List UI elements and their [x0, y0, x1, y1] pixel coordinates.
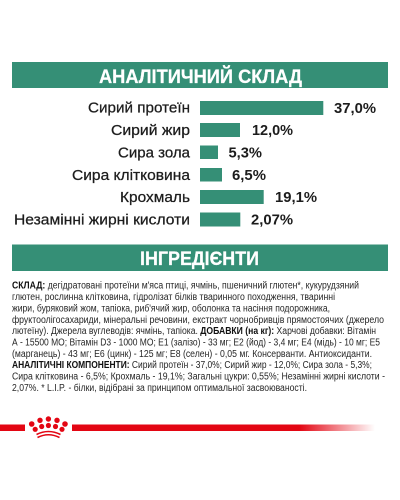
row: crude protein: Сирий протеїн [88, 100, 190, 116]
row: starch [120, 190, 317, 206]
row: crude fibre: Сира клітковина [72, 168, 191, 184]
text block: ingredients: глютен, рослинна клітковина, гідролізат білків тваринного походження, тваринні [12, 291, 335, 303]
row: crude ash: Сира зола [118, 146, 191, 162]
heading: ingredients [12, 244, 388, 271]
row: crude protein: 37,0% [334, 101, 376, 117]
row: crude ash: 5,3% [228, 146, 262, 162]
heading: ingredients: ІНГРЕДІЄНТИ [140, 249, 259, 270]
row: crude fibre: 6,5% [232, 168, 266, 184]
bar chart: analytical composition [14, 100, 376, 228]
text block: ingredients: жири, буряковий жом, тапіока, риб'ячий жир, оболонка та насіння подорожника, [12, 302, 330, 314]
text block: ingredients: 2,07%. * L.I.P. - білки, відібрані за принципом оптимальної засвоюваності. [12, 382, 307, 394]
row: essential fatty acids: Незамінні жирні кислоти [14, 212, 190, 228]
row: essential fatty acids: 2,07% [251, 212, 293, 228]
text block: ingredients: СКЛАД: дегідратовані протеїни м'яса птиці, ячмінь, пшеничний глютен*, кукурудзяний [12, 280, 359, 292]
row: crude fat: Сирий жир [111, 123, 190, 139]
text block: ingredients [12, 280, 385, 394]
heading: analytical composition [12, 62, 388, 88]
row: starch: Крохмаль [120, 190, 190, 206]
red ribbon [0, 424, 375, 431]
row: crude protein [88, 100, 376, 117]
row: starch: 19,1% [275, 190, 317, 206]
row: essential fatty acids [14, 212, 293, 228]
row: crude fibre [72, 168, 266, 184]
icon: royal canin crown [29, 416, 68, 438]
text block: ingredients: лютеїну). Джерела вуглеводів: ячмінь, тапіока. ДОБАВКИ (на кг): Харчові добавки: Вітамін [12, 325, 376, 337]
heading: analytical composition: АНАЛІТИЧНИЙ СКЛАД [99, 64, 302, 88]
row: crude fat [111, 123, 293, 139]
row: crude fat: 12,0% [252, 123, 293, 139]
row: crude ash [118, 146, 262, 162]
